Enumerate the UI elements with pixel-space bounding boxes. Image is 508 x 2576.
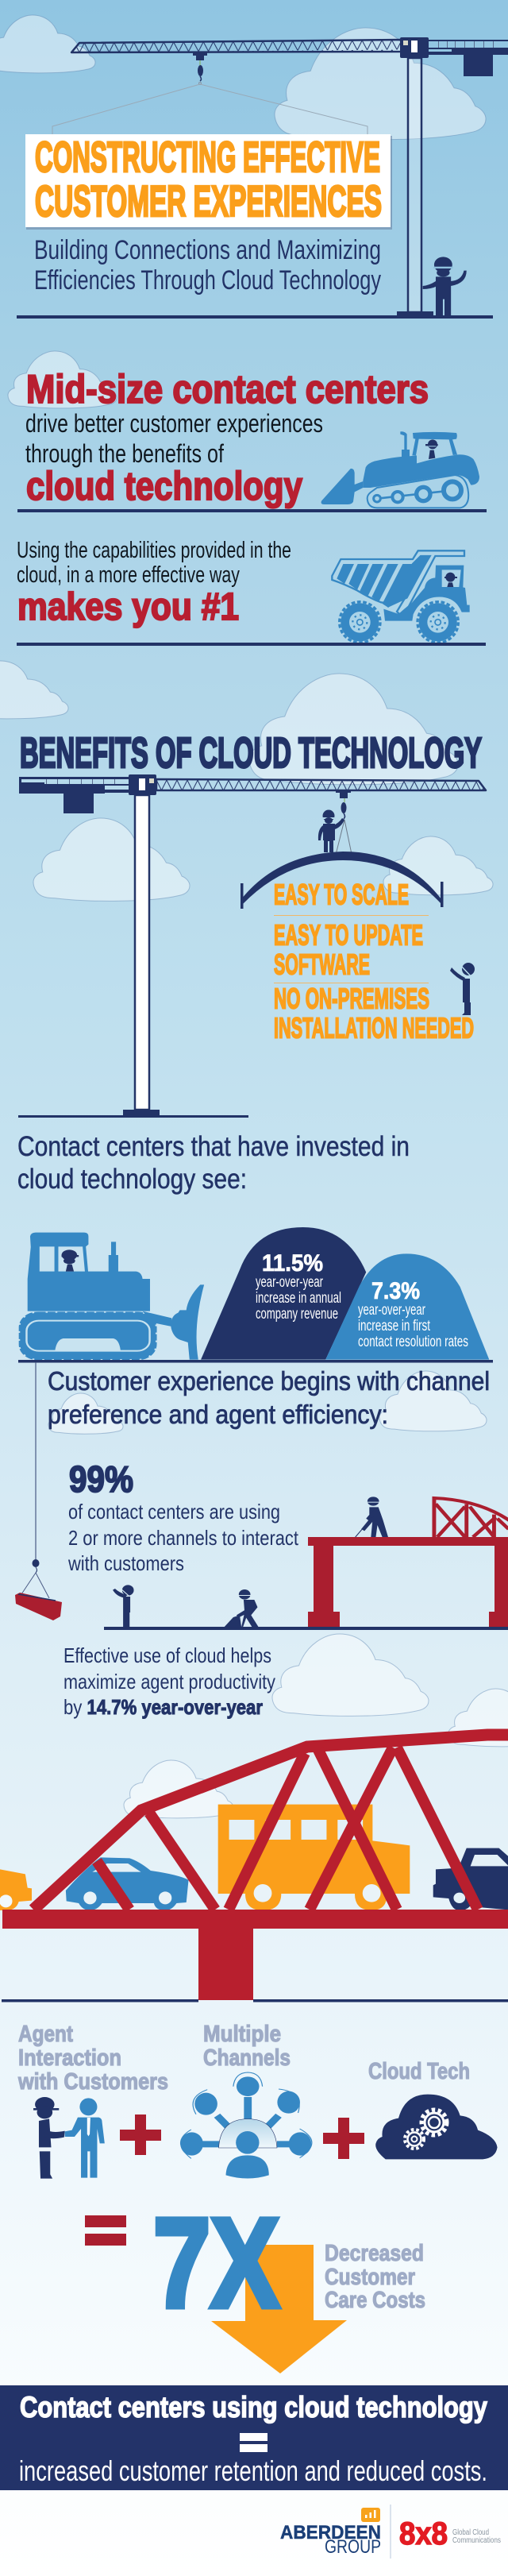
stat: 99% of contact centers: 2 or more channels to interact: [68, 1526, 299, 1550]
text: effective use of cloud: maximize agent productivity: [64, 1670, 275, 1694]
benefits hook and slings: [335, 790, 352, 858]
text: contact centers that have invested: [17, 1131, 410, 1195]
text: using the capabilities: cloud, in a more effective way: [17, 562, 240, 588]
icon: waving worker: [423, 257, 467, 315]
traffic on bridge: [0, 1805, 508, 1910]
label: agent interaction with customers: Interaction: [18, 2045, 121, 2071]
label: decreased customer care costs: Care Costs: [325, 2288, 425, 2313]
label: decreased customer care costs: Customer: [325, 2265, 415, 2290]
label: decreased customer care costs: [325, 2241, 425, 2313]
stat: 11.5% revenue: [256, 1250, 341, 1323]
text: using the capabilities: [17, 538, 291, 588]
subtitle: [34, 235, 381, 295]
text: effective use of cloud: Effective use of cloud helps: [64, 1643, 271, 1667]
stat: 99% of contact centers: with customers: [67, 1551, 184, 1575]
heading: cloud technology: cloud technology: [26, 464, 302, 508]
subtitle: Building Connections and Maximizing: [34, 235, 381, 265]
stats ground line: [18, 1360, 493, 1363]
benefit: no on-premises installation needed: [274, 982, 474, 1044]
label: agent interaction with customers: Agent: [18, 2022, 73, 2047]
section rule 2: [17, 643, 486, 646]
icon: navy car right: [433, 1848, 508, 1910]
stat: 11.5% revenue: increase in annual: [256, 1290, 341, 1307]
text: drive better customer experiences: [25, 409, 323, 468]
subtitle: Efficiencies Through Cloud Technology: [34, 265, 381, 295]
logo: 8x8: [399, 2516, 501, 2551]
background clouds: [0, 15, 508, 1818]
label: agent interaction with customers: [17, 2022, 168, 2095]
text: contact centers that have invested: Contact centers that have invested in: [17, 1131, 410, 1162]
text: effective use of cloud: [64, 1643, 275, 1719]
worker shaking hands: [33, 2097, 65, 2179]
stat: 11.5% revenue: company revenue: [256, 1306, 338, 1323]
text: contact centers that have invested: cloud technology see:: [17, 1164, 247, 1195]
plus sign 2: [323, 2118, 364, 2159]
benefit: easy to scale: EASY TO SCALE: [274, 879, 409, 910]
bridge deck: [2, 1910, 508, 1929]
text: drive better customer experiences: drive better customer experiences: [25, 409, 323, 438]
logo: Aberdeen Group: GROUP: [325, 2536, 381, 2558]
list: orange benefits: [274, 879, 474, 1044]
title text: [35, 133, 382, 226]
benefit: easy to update software: [274, 918, 423, 980]
plus sign 1: [120, 2114, 161, 2155]
bridge truss: [434, 1498, 508, 1537]
icon: arch beam: [241, 852, 443, 909]
crane cab: [400, 37, 429, 58]
icon: cloud with gears: [375, 2095, 498, 2159]
stat: 7X: 7X: [153, 2192, 279, 2334]
benefits crane cab: [129, 774, 156, 795]
icon: handshake: [33, 2097, 105, 2179]
crane jib lattice: [71, 40, 402, 52]
label: multiple channels: Multiple: [203, 2022, 281, 2047]
icon: hanging beam: [15, 1362, 62, 1620]
stat: 99% of contact centers: [67, 1458, 299, 1575]
logo: Aberdeen Group: ABERDEEN: [280, 2522, 381, 2543]
ground line under bridge: [104, 1627, 508, 1630]
stat: 7.3% resolution: year-over-year: [358, 1302, 425, 1319]
stat: 99% of contact centers: of contact centers are using: [68, 1500, 280, 1524]
band equals: [240, 2433, 267, 2452]
benefits crane mast: [123, 795, 160, 1116]
stat: 11.5% revenue: year-over-year: [256, 1274, 323, 1291]
label: multiple channels: Channels: [203, 2045, 291, 2071]
section rule: [17, 509, 487, 512]
heading: customer experience begins: [48, 1366, 490, 1429]
benefits ground line: [18, 1115, 248, 1118]
crane mast: [397, 58, 433, 316]
icon: bulldozer with tracks: [321, 431, 479, 508]
bridge deck and columns: [308, 1537, 508, 1627]
benefit: easy to update software: SOFTWARE: [274, 948, 370, 980]
icon: dump truck: [332, 550, 470, 643]
icon: multiple channels network: [180, 2072, 312, 2178]
chart: stat hills: [201, 1227, 489, 1360]
bridge pillar: [198, 1929, 253, 2000]
large red truss bridge: [2, 1735, 508, 2000]
sign cables: [52, 84, 368, 137]
truss members: [33, 1735, 508, 1910]
label: multiple channels: [203, 2022, 291, 2071]
heading: makes you #1: makes you #1: [17, 586, 239, 628]
title sign: [25, 133, 392, 230]
stat: 11.5% revenue: 11.5%: [262, 1250, 323, 1276]
stat: 99% of contact centers: 99%: [69, 1458, 133, 1500]
icon: shovel worker: [224, 1589, 259, 1627]
stat: 7.3% resolution: [358, 1278, 468, 1350]
icon: worker looking up: [450, 963, 475, 1015]
benefits crane jib: [156, 779, 486, 790]
equals sign: [85, 2215, 126, 2246]
icon: bulldozer with blade: [20, 1233, 204, 1360]
icon: jackhammer worker: [356, 1497, 388, 1537]
customer shaking hands: [65, 2098, 105, 2178]
heading: customer experience begins: preference and agent efficiency:: [48, 1400, 388, 1429]
crane: top hero crane: [52, 37, 508, 316]
icon: worker on arch: [318, 810, 344, 852]
small gear: [405, 2130, 424, 2149]
large gear: [421, 2110, 447, 2135]
crane counter jib and weight: [429, 40, 508, 76]
label: cloud tech: Cloud Tech: [368, 2059, 470, 2084]
icon: blue car: [66, 1857, 189, 1910]
stat: 7.3% resolution: 7.3%: [371, 1278, 420, 1304]
conclusion band: [0, 2385, 508, 2490]
crane: benefits crane: [19, 774, 486, 1116]
logo: Aberdeen Group: [280, 2508, 381, 2558]
icon: orange car left: [0, 1869, 32, 1910]
benefits crane counter jib: [19, 777, 129, 813]
label: decreased customer care costs: Decreased: [325, 2241, 424, 2266]
icon: school bus: [218, 1805, 410, 1910]
label: agent interaction with customers: with Customers: [17, 2069, 168, 2095]
hero ground line: [17, 315, 493, 319]
hook and trolley: [193, 52, 207, 84]
heading: mid-size contact centers: Mid-size contact centers: [26, 367, 429, 411]
logo: 8x8: Global Cloud: [452, 2528, 489, 2537]
text: using the capabilities: Using the capabilities provided in the: [17, 538, 291, 563]
stat: 7.3% resolution: increase in first: [358, 1318, 431, 1334]
small red bridge: [308, 1498, 508, 1627]
text: effective use of cloud: by 14.7% year-over-year: [64, 1695, 263, 1719]
down arrow: [211, 2245, 347, 2373]
road line: [2, 1999, 198, 2002]
logo: 8x8: 8x8: [399, 2516, 448, 2551]
icon: worker looking up ground: [113, 1585, 134, 1627]
text: drive better customer experiences: through the benefits of: [25, 439, 224, 468]
